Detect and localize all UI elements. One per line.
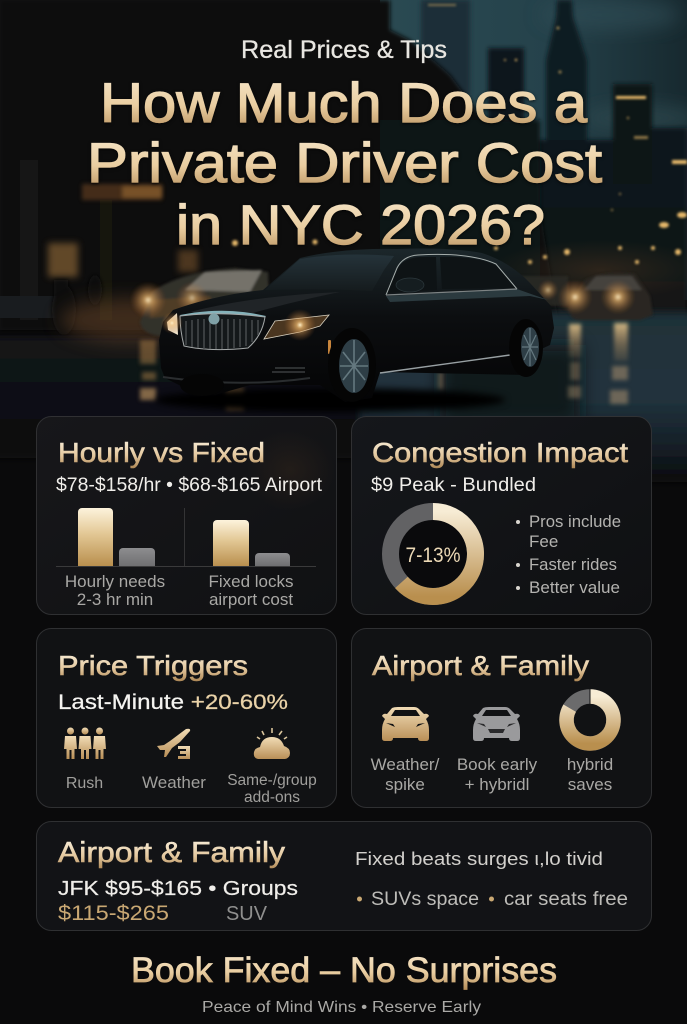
- caption: weather spike: Weather/: [371, 755, 439, 774]
- caption: rush: Rush: [66, 775, 103, 792]
- caption: same-day and group add-ons: Same-/group: [227, 772, 317, 789]
- wet road reflections: [140, 323, 628, 410]
- icon: gold car: [382, 707, 429, 741]
- background car right: [520, 273, 653, 320]
- title: [87, 71, 602, 256]
- panel: Airport & Family icons: [352, 628, 652, 808]
- tagline: Peace of Mind Wins • Reserve Early: [202, 999, 481, 1016]
- heading: Hourly vs Fixed: [58, 437, 265, 468]
- front wheel: [328, 328, 376, 402]
- eyebrow: Real Prices & Tips: Real Prices & Tips: [241, 36, 447, 64]
- fixed beats surges note: Fixed beats surges ι,lo tivid: [355, 849, 603, 869]
- bullet notes: SUVs space: [371, 889, 479, 910]
- benefit list: [516, 512, 621, 597]
- caption: same-day and group add-ons: add-ons: [244, 789, 300, 806]
- hood highlight: [190, 292, 340, 318]
- donut chart 7-13%: [390, 512, 476, 596]
- heading: Congestion Impact: [372, 437, 628, 468]
- caption: hourly: Hourly needs: [65, 572, 165, 591]
- last-minute surcharge: Last-Minute +20-60%: [58, 691, 288, 714]
- headlights: [264, 315, 329, 339]
- benefit list: Better value: [529, 578, 620, 597]
- mirror: [396, 278, 424, 292]
- caption: book early: + hybridl: [465, 775, 529, 794]
- icon: plane: [157, 729, 190, 759]
- price summary: $78-$158/hr • $68-$165 Airport: [56, 475, 323, 496]
- donut: hybrid saves: [566, 689, 614, 744]
- bullet notes: car seats free: [504, 889, 628, 910]
- icon: people: [64, 728, 106, 759]
- shoulder highlight: [386, 289, 548, 302]
- lower trim: [380, 355, 510, 373]
- donut chart 7-13%: 7-13%: [406, 544, 460, 567]
- heading: Airport & Family: [372, 650, 589, 681]
- panel: Hourly vs Fixed: [36, 416, 336, 614]
- benefit list: Faster rides: [529, 555, 617, 574]
- caption: hourly: 2-3 hr min: [77, 590, 153, 609]
- panel: Airport & Family prices: [36, 822, 652, 930]
- group price: $115-$265: [58, 902, 169, 925]
- warm tint: [245, 430, 335, 510]
- caption: weather: Weather: [142, 773, 206, 792]
- hero limousine: [155, 248, 554, 412]
- rear wheel: [509, 319, 543, 377]
- panel: Price Triggers: [36, 628, 336, 808]
- SUV label: SUV: [226, 903, 268, 925]
- caption: hybrid saves: saves: [568, 775, 612, 794]
- car body: [159, 248, 554, 402]
- call to action heading: Book Fixed – No Surprises: [131, 951, 557, 990]
- background car left: [130, 268, 270, 336]
- panel: Congestion Impact: [352, 416, 652, 614]
- grille: [180, 314, 265, 350]
- caption: book early: Book early: [457, 755, 537, 774]
- benefit list: Fee: [529, 532, 558, 551]
- caption: weather spike: spike: [385, 775, 425, 794]
- bullet notes: [357, 889, 628, 910]
- benefit list: Pros include: [529, 512, 621, 531]
- caption: hybrid saves: hybrid: [567, 755, 613, 774]
- far front wheel: [180, 374, 224, 396]
- heading: Airport & Family: [58, 837, 286, 869]
- title: in NYC 2026?: [176, 193, 545, 256]
- windshield: [265, 255, 394, 291]
- caption: fixed: airport cost: [209, 590, 293, 609]
- title: How Much Does a: [100, 71, 588, 134]
- heading: Price Triggers: [58, 650, 248, 681]
- bar chart: [56, 508, 316, 566]
- JFK and groups pricing: JFK $95-$165 • Groups: [58, 878, 298, 900]
- peak fee: $9 Peak - Bundled: [371, 475, 536, 496]
- title: Private Driver Cost: [87, 131, 602, 194]
- side windows: [386, 257, 516, 293]
- icon: gray car: [473, 707, 520, 741]
- icon: sun and cloud: [254, 728, 290, 759]
- caption: fixed: Fixed locks: [208, 572, 294, 591]
